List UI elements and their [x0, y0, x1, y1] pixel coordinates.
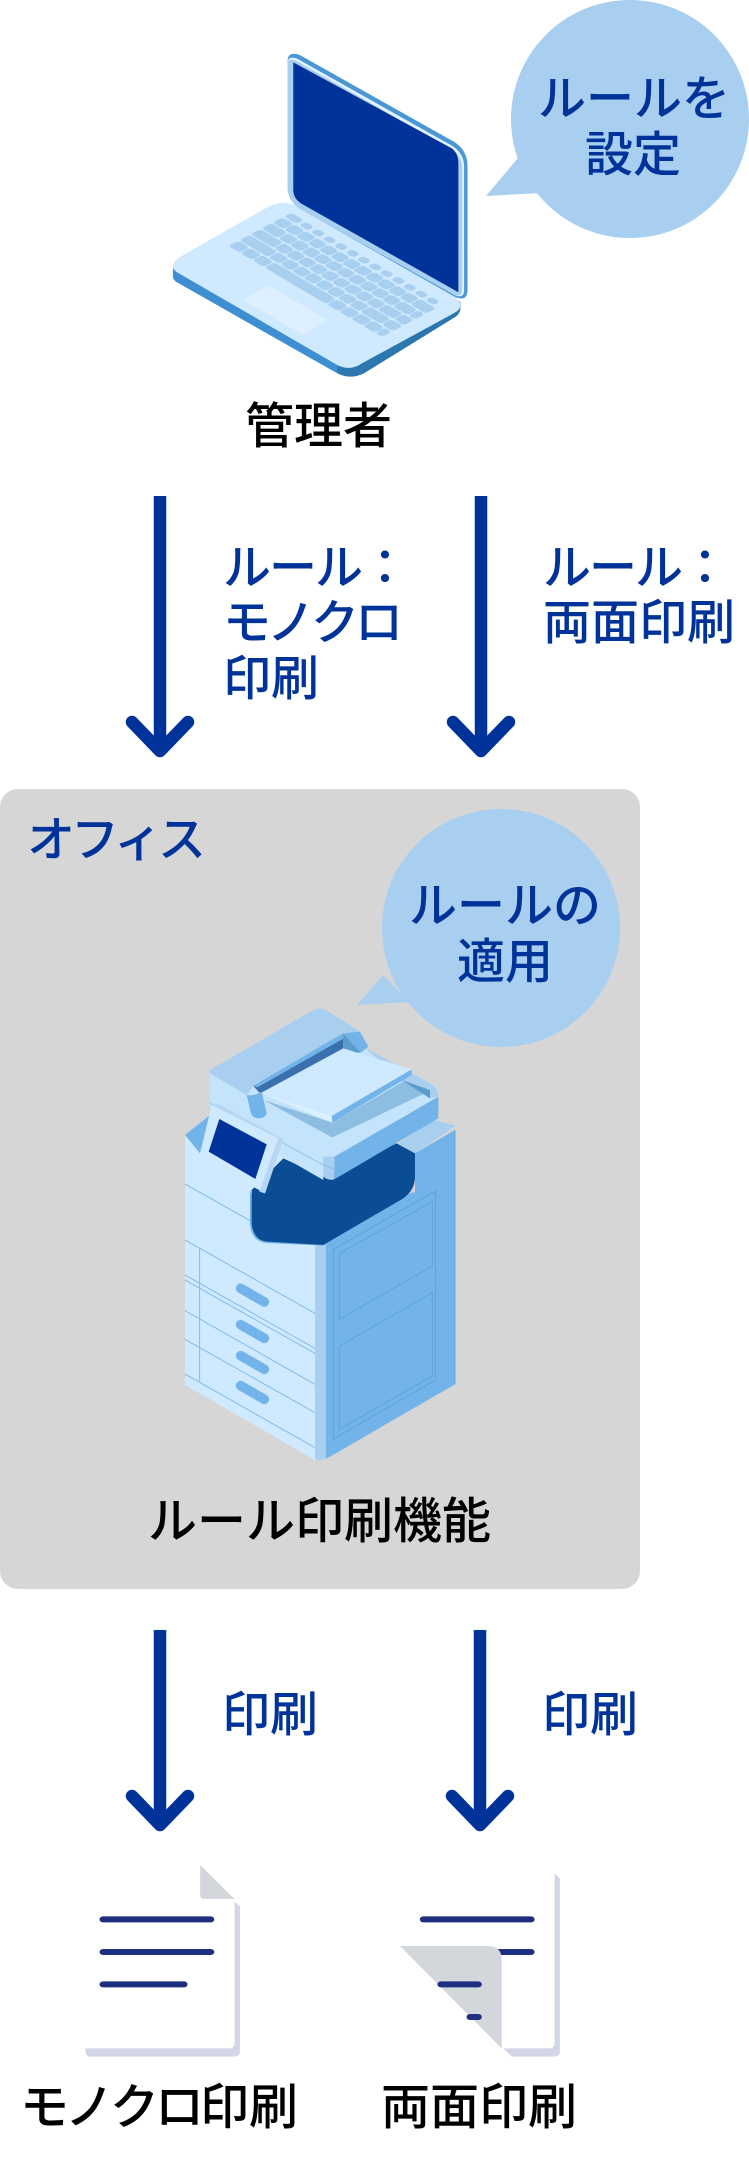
label: office: オフィス [27, 814, 202, 867]
speech bubble: apply rules: ルールの [409, 880, 601, 933]
icon: monochrome document [85, 1865, 240, 2057]
speech bubble: set rules: ルールを [538, 73, 730, 126]
label: rule monochrome printing: ルール： [223, 542, 407, 595]
label: rule duplex printing: ルール： [543, 542, 727, 595]
arrow: print duplex [452, 1630, 508, 1825]
speech bubble: apply rules: 適用 [457, 936, 553, 989]
arrow: print monochrome [132, 1630, 188, 1825]
speech bubble: set rules: 設定 [585, 129, 681, 182]
icon: multifunction printer [185, 1008, 456, 1460]
label: print left: 印刷 [222, 1689, 318, 1742]
label: monochrome printing: モノクロ印刷 [20, 2081, 298, 2135]
speech bubble: set rules [486, 0, 749, 238]
label: rule duplex printing [543, 542, 735, 650]
arrow: rule monochrome [132, 496, 188, 751]
icon: laptop [173, 54, 468, 377]
panel: office background [0, 789, 640, 1589]
label: print right: 印刷 [542, 1689, 638, 1742]
label: rule monochrome printing: 印刷 [223, 653, 319, 706]
arrow: rule duplex [453, 496, 509, 751]
label: rule print function: ルール印刷機能 [148, 1495, 491, 1549]
label: duplex printing: 両面印刷 [381, 2081, 577, 2135]
label: rule duplex printing: 両面印刷 [543, 597, 735, 650]
label: administrator: 管理者 [245, 400, 392, 454]
label: rule monochrome printing: モノクロ [223, 597, 399, 650]
label: rule monochrome printing [223, 542, 407, 706]
icon: duplex document [400, 1873, 560, 2057]
speech bubble: apply rules [357, 809, 620, 1047]
